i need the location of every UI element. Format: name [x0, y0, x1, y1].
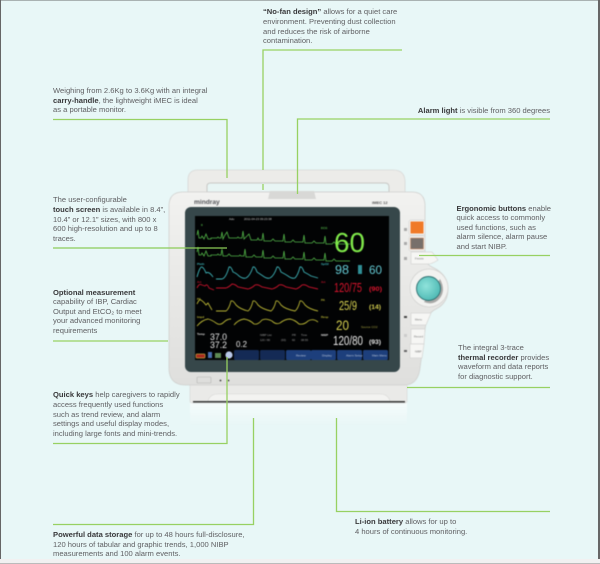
screen bezel: [185, 207, 400, 372]
text: ergonomic buttons: Ergonomic buttons enable: [456, 204, 551, 212]
menu, record and NIBP buttons: [404, 228, 431, 358]
text: quick keys: Quick keys help caregivers to rapidly: [53, 390, 180, 399]
text: optional measurement: your advanced monitoring: [53, 316, 140, 325]
waveform channel labels: ECG: [321, 226, 328, 230]
text: no-fan design: contamination.: [263, 36, 312, 45]
text: data storage: measurements and 100 alarm events.: [53, 549, 180, 558]
waveform channel labels: Temp: [197, 332, 205, 336]
rotary knob: [410, 269, 448, 307]
alarm light bar: [268, 191, 316, 199]
waveform channel labels: II: [201, 223, 203, 227]
text: thermal recorder: for diagnostic support.: [458, 372, 533, 381]
temperature readings: 37.2: [210, 340, 227, 351]
text: quick keys: including large fonts and mini-trends.: [53, 429, 177, 438]
stand base: [190, 382, 407, 403]
brand labels: iMEC 12: [372, 200, 388, 205]
text: quick keys: such as trend review, and alarm: [53, 410, 160, 418]
respiration reading: [336, 317, 378, 333]
waveform channel labels: [197, 223, 329, 337]
pleth waveform: [197, 267, 318, 279]
text: thermal recorder: thermal recorder provides: [458, 353, 549, 362]
text: touch screen: 10.4” or 12.1” sizes, with 800 x: [53, 214, 156, 224]
NIBP list: 08:55: [301, 338, 308, 342]
heart rate reading: 60: [334, 227, 365, 258]
brand labels: [194, 199, 388, 206]
text: no-fan design: environment. Preventing dust collection: [263, 17, 396, 26]
connector: no-fan design: [263, 50, 402, 190]
text: Li-ion battery: Li-ion battery allows for up to: [355, 517, 456, 526]
connector: quick keys: [53, 357, 227, 444]
connector: optional measurement: [53, 340, 168, 342]
text: no-fan design: and reduces the risk of airborne: [263, 27, 370, 36]
NIBP list: Time: [301, 333, 308, 337]
respiration reading: 20: [336, 317, 349, 333]
text: optional measurement: capability of IBP, Cardiac: [53, 297, 137, 306]
text: thermal recorder: waveform and data reports: [458, 362, 548, 371]
menu, record and NIBP buttons: Record: [414, 334, 423, 338]
waveform channel labels: Impd: [197, 315, 204, 319]
text: thermal recorder: [458, 343, 549, 381]
status bar text: 2011-04-23 09:23:38: [244, 217, 272, 221]
text: data storage: [53, 530, 245, 558]
PA pressure reading: 25/9: [339, 299, 357, 313]
SpO2 reading: 60: [369, 263, 382, 277]
temperature readings: [210, 332, 247, 351]
temperature readings: 37.0: [210, 332, 227, 343]
reflection under monitor: [190, 403, 407, 426]
temperature readings: 0.2: [236, 339, 247, 349]
quick key bar: Main Menu: [372, 354, 387, 358]
NIBP reading: (93): [369, 339, 381, 346]
text: Li-ion battery: 4 hours of continuous monitoring.: [355, 527, 467, 536]
NIBP list: [260, 333, 308, 342]
text: carry-handle: carry-handle, the lightweight iMEC is ideal: [53, 96, 198, 105]
front panel label and indicators: [197, 377, 229, 383]
text: ergonomic buttons: [456, 204, 551, 251]
SpO2 reading: [335, 262, 382, 277]
text: carry-handle: Weighing from 2.6Kg to 3.6Kg with an integral: [53, 86, 207, 95]
brand labels: mindray: [194, 199, 220, 206]
ECG waveforms: [197, 230, 350, 261]
arterial waveform: [197, 284, 318, 290]
connector: Li-ion battery: [336, 418, 550, 512]
alarm and pause buttons: Freeze: [415, 256, 424, 260]
waveform channel labels: Art: [197, 280, 201, 284]
alarm and pause buttons: [409, 220, 438, 264]
status bar text: Adu: [229, 217, 235, 221]
connector: carry-handle: [53, 120, 227, 178]
text: Li-ion battery: [355, 517, 467, 536]
waveform channel labels: PA: [197, 297, 202, 301]
quick key bar: Display: [322, 354, 332, 358]
NIBP list: NIBP List: [260, 333, 272, 337]
text: touch screen: touch screen is available in 8.4”,: [53, 205, 165, 214]
waveform channel labels: PA: [321, 298, 326, 302]
monitor body: [169, 192, 448, 385]
NIBP list: (93): [281, 338, 286, 342]
text: quick keys: settings and useful display modes,: [53, 419, 169, 428]
connector: thermal recorder: [407, 386, 550, 388]
text: carry-handle: as a portable monitor.: [53, 105, 126, 114]
connector: ergonomic buttons: [419, 254, 550, 256]
PA pressure reading: [339, 299, 381, 313]
waveform channel labels: Art: [321, 280, 325, 284]
waveform channel labels: Resp: [321, 315, 329, 319]
arterial pressure reading: (90): [369, 286, 382, 293]
connector: touch screen: [53, 247, 227, 249]
connector: alarm light: [298, 119, 550, 194]
arterial pressure reading: 120/75: [334, 281, 362, 295]
NIBP list: 60: [292, 338, 296, 342]
text: no-fan design: [263, 7, 397, 45]
waveform channel labels: SpO2: [321, 262, 329, 266]
text: ergonomic buttons: alarm silence, alarm pause: [456, 232, 547, 241]
menu, record and NIBP buttons: Menu: [415, 318, 422, 322]
text: quick keys: [53, 390, 180, 438]
text: optional measurement: [53, 288, 142, 335]
SpO2 reading: 98: [335, 262, 349, 277]
PA waveform: [197, 300, 318, 311]
text: optional measurement: Optional measurement: [53, 288, 135, 296]
screen: [195, 216, 389, 360]
NIBP list: PR: [292, 333, 296, 337]
text: data storage: Powerful data storage for up to 48 hours full-disclosure,: [53, 530, 245, 539]
text: optional measurement: Output and EtCO₂ to meet: [53, 307, 142, 316]
text: no-fan design: “No-fan design” allows for a quiet care: [263, 7, 397, 16]
text: touch screen: traces.: [53, 234, 76, 243]
connector: data storage: [53, 418, 254, 524]
text: thermal recorder: The integral 3-trace: [458, 343, 524, 352]
text: quick keys: access frequently used functions: [53, 400, 163, 409]
waveform channel labels: Pleth: [197, 262, 205, 266]
quick key bar: Review: [296, 354, 307, 358]
text: ergonomic buttons: and start NIBP.: [456, 242, 507, 251]
status bar text: [229, 217, 272, 221]
NIBP reading: 120/80: [333, 334, 363, 348]
quick key bar: [196, 350, 388, 360]
PA pressure reading: (14): [369, 304, 381, 311]
NIBP list: 120 / 80: [260, 338, 271, 342]
text: alarm light: Alarm light is visible from 360 degrees: [418, 106, 550, 115]
text: carry-handle: [53, 86, 207, 114]
text: touch screen: The user-configurable: [53, 195, 127, 204]
text: ergonomic buttons: quick access to commonly: [456, 213, 545, 222]
menu, record and NIBP buttons: NIBP: [415, 350, 422, 354]
text: data storage: 120 hours of tabular and graphic trends, 1,000 NIBP: [53, 540, 229, 549]
carry handle: [188, 170, 405, 200]
text: optional measurement: requirements: [53, 326, 97, 335]
respiration reading: Source CO2: [361, 325, 378, 329]
resp waveform: [197, 319, 318, 326]
quick key bar: Alarm Setup: [346, 354, 363, 358]
waveform channel labels: NIBP: [321, 333, 328, 337]
text: touch screen: 600 high-resolution and up to 8: [53, 224, 158, 233]
text: ergonomic buttons: used functions, such as: [456, 223, 536, 232]
text: touch screen: [53, 195, 165, 243]
